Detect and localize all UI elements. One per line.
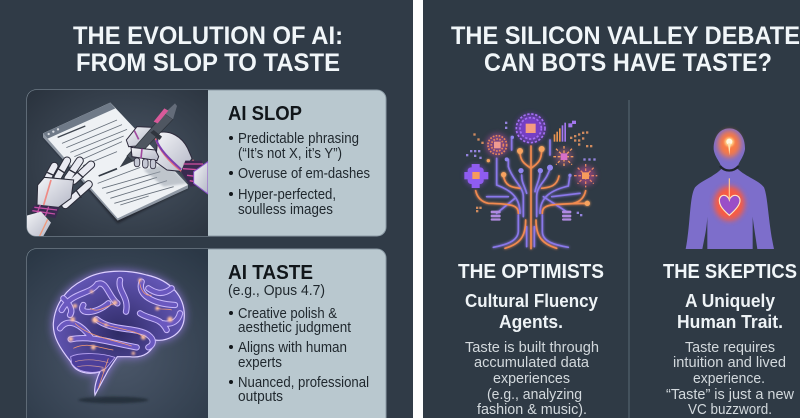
icon: circuit tree <box>464 114 597 249</box>
panel: left background <box>0 0 413 418</box>
illustration: robot hands writing on a document <box>25 90 208 237</box>
heading: AI taste: AI TASTE <box>228 262 313 284</box>
text: skeptics argument <box>666 339 794 418</box>
text: optimists argument: experiences <box>493 370 570 387</box>
list: AI taste traits: aesthetic judgment <box>238 320 351 336</box>
column: optimists <box>458 261 604 418</box>
paper <box>43 138 188 224</box>
illustration: glowing brain <box>27 249 208 418</box>
subheading: uniquely human trait <box>677 291 783 332</box>
divider between columns <box>628 100 630 418</box>
subheading: cultural fluency agents <box>465 291 598 332</box>
panel: AI taste card <box>27 249 386 418</box>
gripping fingers <box>131 147 159 161</box>
text: skeptics argument: intuition and lived <box>673 354 786 371</box>
right robot hand <box>155 132 192 172</box>
panel: AI slop card <box>25 90 386 237</box>
subheading: example model: (e.g., Opus 4.7) <box>228 282 325 299</box>
list: AI slop traits: Predictable phrasing <box>238 131 359 147</box>
heading: the optimists: THE OPTIMISTS <box>458 261 604 283</box>
title: evolution of AI: THE EVOLUTION OF AI: <box>73 22 343 50</box>
title: Silicon Valley debate: CAN BOTS HAVE TASTE? <box>484 49 772 77</box>
databases <box>491 211 571 221</box>
subheading: uniquely human trait: A Uniquely <box>685 291 775 311</box>
column: skeptics <box>663 261 797 418</box>
icon: human with glowing head and heart <box>686 128 774 249</box>
list: AI taste traits <box>229 306 369 405</box>
text: optimists argument: Taste is built through <box>465 339 599 356</box>
list: AI slop traits: soulless images <box>238 202 333 218</box>
list: AI slop traits <box>229 131 370 218</box>
list: AI slop traits: Hyper-perfected, <box>238 187 336 203</box>
list: AI taste traits: Creative polish & <box>238 306 337 322</box>
subheading: cultural fluency agents: Agents. <box>499 312 563 332</box>
title: evolution of AI: FROM SLOP TO TASTE <box>76 49 340 77</box>
subheading: cultural fluency agents: Cultural Fluency <box>465 291 598 311</box>
list: AI slop traits: (“It’s not X, it’s Y”) <box>238 146 342 162</box>
glow halos <box>465 114 596 186</box>
heading: AI slop: AI SLOP <box>228 103 302 125</box>
list: AI taste traits: Nuanced, professional <box>238 375 369 391</box>
text: skeptics argument: “Taste” is just a new <box>666 386 794 403</box>
text: optimists argument: (e.g., analyzing <box>487 386 582 403</box>
panel: white divider strip <box>413 0 423 418</box>
list: AI taste traits: Aligns with human <box>238 340 347 356</box>
text: skeptics argument: Taste requires <box>685 339 775 356</box>
panel: right background <box>423 0 800 418</box>
text: skeptics argument: experience. <box>693 370 765 387</box>
text: skeptics argument: VC buzzword. <box>688 401 772 418</box>
list: AI taste traits: experts <box>238 355 282 371</box>
list: AI taste traits: outputs <box>238 389 283 405</box>
left robot hand <box>47 161 91 205</box>
text: optimists argument <box>465 339 599 418</box>
thumb <box>126 127 153 147</box>
text: optimists argument: fashion & music). <box>477 401 587 418</box>
title: evolution of AI <box>73 22 343 77</box>
subheading: uniquely human trait: Human Trait. <box>677 312 783 332</box>
pen <box>120 156 133 167</box>
title: Silicon Valley debate <box>451 22 800 77</box>
text: optimists argument: accumulated data <box>474 354 590 371</box>
bars and pixels <box>554 128 561 142</box>
list: AI slop traits: Overuse of em-dashes <box>238 166 370 182</box>
chips <box>516 114 545 143</box>
